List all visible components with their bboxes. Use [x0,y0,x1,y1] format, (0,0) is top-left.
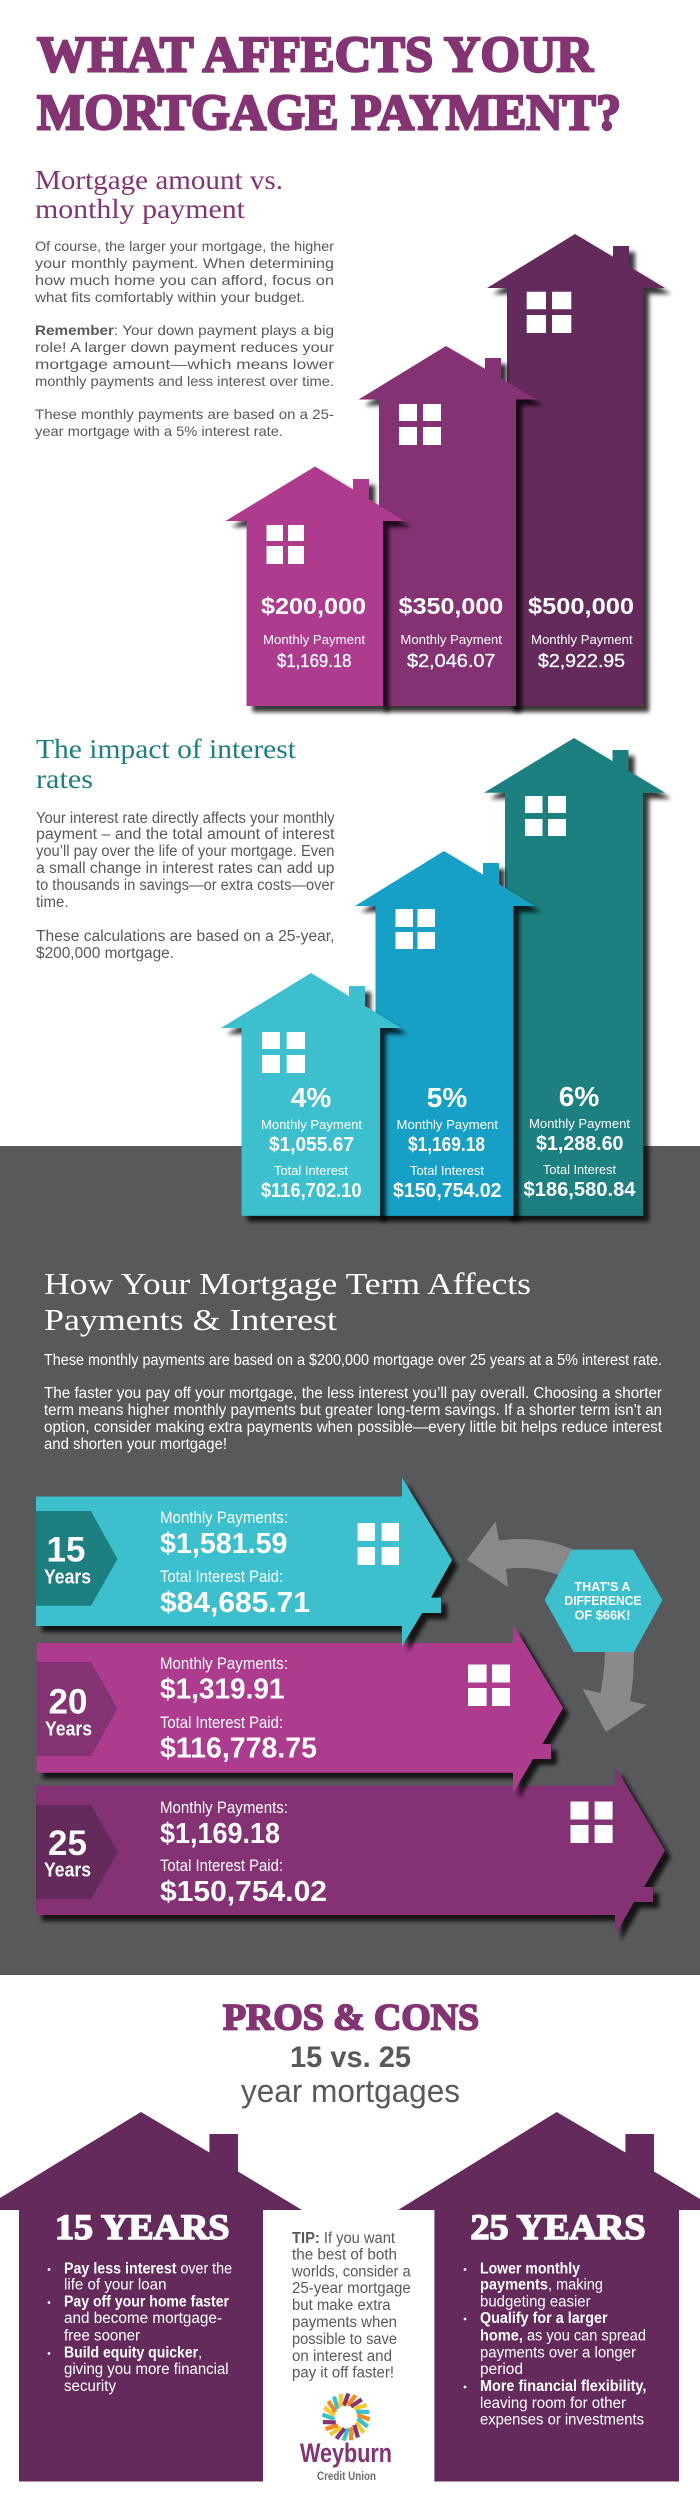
title [37,28,621,142]
house: 6%: $186,580.84 [524,1179,636,1201]
text block: mortgage term: term means higher monthly payments but greater long-term savings. If a shorter term isn’t an [44,1402,662,1419]
callout: difference of $66K: THAT'S A [574,1579,631,1594]
arrow: 25 years: Total Interest Paid: [160,1856,283,1875]
arrow: 15 years: Years [44,1566,91,1588]
house: 6%: 6% [559,1081,599,1112]
text block: interest rates: a small change in interest rates can add up [36,860,335,877]
panel: 15 years house: Build equity quicker, [64,2344,202,2361]
heading: mortgage term: Payments & Interest [44,1302,337,1337]
house: $500,000: Monthly Payment [531,632,633,647]
panel: 15 years house: giving you more financial [64,2361,229,2378]
panel: 15 years house: Pay off your home faster [64,2293,229,2310]
title: MORTGAGE PAYMENT? [37,86,621,142]
house: 5%: 5% [427,1082,467,1113]
house: $200,000: Monthly Payment [263,632,365,647]
house: $500,000 [487,234,665,706]
arrow: 25 years [36,1767,665,1935]
panel: 25 years house: payments, making [480,2276,603,2294]
arrow: 20 years [37,1625,563,1793]
house: 4%: $116,702.10 [261,1180,362,1202]
house: 4% [221,973,401,1216]
house: 5% [355,851,535,1216]
house: $500,000: $2,922.95 [538,651,625,671]
text block: mortgage term: These monthly payments are based on a $200,000 mortgage over 25 years at a 5% interest rate. [44,1352,662,1369]
arrow: 15 years: Monthly Payments: [160,1508,288,1527]
text block: interest rates: payment – and the total amount of interest [36,826,335,843]
text block: mortgage term: The faster you pay off your mortgage, the less interest you’ll pay overall. Choosing a shorter [44,1385,662,1402]
panel: 25 years house: expenses or investments [480,2412,644,2429]
house: 6% [484,738,665,1216]
text block: tip: payments when [292,2314,397,2331]
panel: 25 years house: leaving room for other [480,2395,626,2412]
arrow: 20 years: $1,319.91 [160,1674,284,1706]
house: 4%: $1,055.67 [269,1134,354,1156]
arrow: 20 years: Years [45,1718,92,1740]
arrow: 25 years: Monthly Payments: [160,1798,288,1817]
arrow: 20 years: $116,778.75 [160,1732,317,1764]
logo: Weyburn Credit Union: Credit Union [317,2469,376,2483]
house: $200,000: $200,000 [261,593,366,619]
panel: 25 years house: period [480,2361,523,2378]
arrow: curved up to 15 years [467,1522,573,1587]
arrow: 15 years: $84,685.71 [160,1587,310,1619]
arrow: curved down to 25 years [583,1650,647,1732]
text block: mortgage amount: role! A larger down payment reduces your [35,339,334,355]
house: 4%: 4% [291,1082,331,1113]
text block: tip: TIP: If you want [292,2230,396,2247]
title: WHAT AFFECTS YOUR [37,28,594,84]
house: $200,000 [226,466,405,706]
text block: mortgage amount: how much home you can afford, focus on [35,272,334,288]
panel: 15 years house: life of your loan [64,2276,166,2294]
house: 4%: Total Interest [274,1163,348,1178]
text block: interest rates: $200,000 mortgage. [36,945,174,962]
panel: 25 years house: 25 YEARS [470,2207,646,2247]
heading: interest rates [36,734,297,794]
heading: mortgage amount: monthly payment [35,194,246,224]
house: 6%: $1,288.60 [536,1133,624,1155]
text block: tip: the best of both [292,2247,397,2264]
text block: mortgage amount [34,238,334,439]
text block: mortgage amount: monthly payments and less interest over time. [35,373,334,389]
heading: pros and cons: year mortgages [241,2073,460,2109]
text block: interest rates: to thousands in savings—or extra costs—over [36,877,334,894]
panel: 25 years house [398,2112,700,2482]
text block: mortgage amount: your monthly payment. When determining [35,255,334,271]
text block: tip: 25-year mortgage [292,2280,411,2297]
text block: tip: but make extra [292,2297,391,2314]
house: 5%: $1,169.18 [408,1134,485,1156]
arrow: 25 years: $1,169.18 [160,1818,280,1850]
arrow: 20 years: Monthly Payments: [160,1654,288,1673]
panel: 15 years house: security [64,2378,116,2395]
text block: mortgage amount: what fits comfortably within your budget. [34,289,305,305]
house: 5%: Total Interest [410,1163,484,1178]
arrow: 25 years: $150,754.02 [160,1876,327,1908]
text block: mortgage term: and shorten your mortgage! [44,1436,227,1453]
panel: 15 years house: free sooner [64,2328,140,2344]
arrow: 20 years: 20 [49,1682,87,1722]
callout: difference of $66K: OF $66K! [574,1608,630,1623]
callout: difference of $66K [545,1550,662,1652]
panel: 15 years house [0,2112,302,2482]
house: 6%: Total Interest [543,1162,616,1177]
text block: interest rates: Your interest rate directly affects your monthly [36,810,335,827]
house: $350,000 [358,346,537,706]
panel: 25 years house: budgeting easier [480,2293,591,2310]
heading: pros and cons: PROS & CONS [223,1998,479,2038]
text block: tip: worlds, consider a [291,2264,411,2281]
panel: 25 years house: payments over a longer [480,2344,636,2361]
dark grey background band [0,1146,700,1975]
heading: mortgage amount: Mortgage amount vs. [35,165,283,195]
text block: interest rates: you’ll pay over the life of your mortgage. Even [36,843,334,860]
text block: mortgage amount: mortgage amount—which means lower [35,356,334,372]
arrow: 25 years: 25 [48,1824,87,1863]
house: $350,000: $2,046.07 [407,651,496,671]
house: 4%: Monthly Payment [261,1117,362,1132]
house: $500,000: $500,000 [528,593,634,619]
heading: mortgage term [44,1266,531,1337]
logo: Weyburn Credit Union [300,2393,392,2483]
text block: interest rates [36,810,335,962]
text block: mortgage term: option, consider making extra payments when possible—every little bit helps reduce interest [44,1419,663,1436]
heading: interest rates: rates [36,764,93,794]
text block: interest rates: These calculations are based on a 25-year, [36,928,334,945]
house: $350,000: Monthly Payment [400,632,502,647]
logo: Weyburn Credit Union: Weyburn [300,2438,392,2468]
panel: 15 years house: 15 YEARS [55,2207,230,2247]
house: 5%: $150,754.02 [393,1180,502,1202]
house: 5%: Monthly Payment [396,1117,498,1132]
text block: mortgage amount: year mortgage with a 5% interest rate. [35,423,283,439]
arrow: 15 years: 15 [47,1530,85,1569]
panel: 25 years house: Qualify for a larger [480,2310,608,2327]
arrow: 20 years: Total Interest Paid: [160,1713,283,1732]
heading: interest rates: The impact of interest [36,734,297,764]
text block: mortgage amount: Remember : Your down payment plays a big [35,322,334,338]
text block: mortgage amount: Of course, the larger your mortgage, the higher [35,238,334,254]
heading: mortgage amount [35,165,283,224]
arrow: 15 years: $1,581.59 [160,1528,288,1560]
panel: 25 years house: home, as you can spread [480,2328,646,2344]
arrow: 15 years [36,1478,452,1646]
text block: mortgage term [44,1352,663,1453]
text block: tip: possible to save [292,2331,397,2348]
text block: mortgage amount: These monthly payments are based on a 25- [35,406,334,422]
text block: tip: pay it off faster! [292,2364,394,2381]
text block: interest rates: time. [36,894,68,911]
arrow: 15 years: Total Interest Paid: [160,1567,283,1586]
house: 6%: Monthly Payment [529,1116,630,1131]
heading: pros and cons: 15 vs. 25 [290,2041,411,2074]
panel: 15 years house: Pay less interest over the [64,2261,232,2278]
panel: 15 years house: and become mortgage- [64,2310,222,2327]
house: $350,000: $350,000 [399,593,503,619]
arrow: 25 years: Years [44,1860,91,1882]
panel: 25 years house: Lower monthly [480,2261,580,2278]
house: $200,000: $1,169.18 [277,651,352,671]
text block: tip [291,2230,411,2381]
text block: tip: on interest and [292,2348,392,2365]
heading: mortgage term: How Your Mortgage Term Affects [44,1266,531,1301]
heading: pros and cons [223,1998,479,2109]
panel: 25 years house: More financial flexibility, [480,2378,646,2395]
callout: difference of $66K: DIFFERENCE [564,1593,642,1608]
